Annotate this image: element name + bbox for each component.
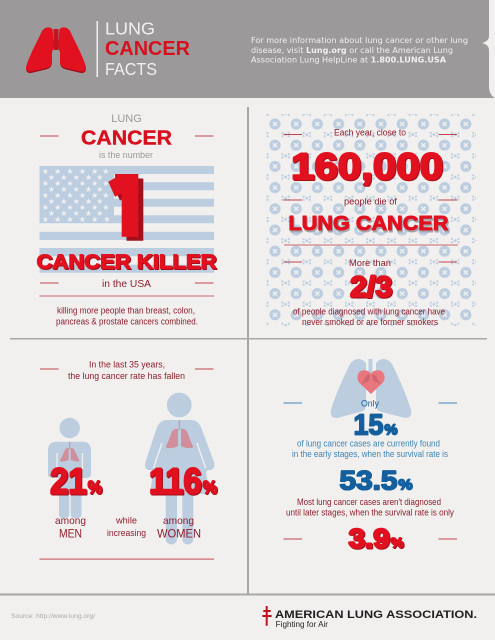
chart: american flag: ★ <box>96 185 103 194</box>
chart: american flag: ★ <box>42 167 49 176</box>
chart: american flag: ★ <box>85 209 92 218</box>
chart: american flag: ★ <box>91 191 98 200</box>
panel: survival rates <box>284 359 457 554</box>
header title: FACTS <box>105 59 157 79</box>
header band <box>0 0 495 98</box>
heading: lung cancer: is the number <box>99 150 153 161</box>
label: among women <box>157 515 201 540</box>
logo: american lung association <box>262 606 477 629</box>
chart: american flag: ★ <box>73 209 80 218</box>
chart: american flag: ★ <box>54 179 61 188</box>
label: while increasing: increasing <box>107 528 146 538</box>
stat: 15%: 15 <box>354 410 384 442</box>
stat: 53.5%: 53.5 <box>340 466 398 496</box>
chart: american flag: ★ <box>79 215 86 224</box>
divider rule <box>284 244 458 246</box>
heading: lung cancer: LUNG <box>111 113 142 125</box>
text: last 35 years <box>40 360 214 381</box>
text: last 35 years: the lung cancer rate has fallen <box>68 371 185 381</box>
text: people diagnosed: never smoked or are former smokers <box>302 317 438 327</box>
text: killing more people <box>56 306 198 326</box>
logo wordmark: Fighting for Air <box>276 620 328 629</box>
label: while increasing <box>107 516 146 538</box>
chart: american flag: ★ <box>48 185 55 194</box>
text: early stages <box>292 438 448 459</box>
chart: american flag: ★ <box>102 167 109 176</box>
chart: american flag: ★ <box>79 191 86 200</box>
chart: american flag: ★ <box>54 191 61 200</box>
label: among men <box>55 515 86 540</box>
chart: american flag: ★ <box>60 209 67 218</box>
chart: american flag: ★ <box>91 215 98 224</box>
chart: american flag: ★ <box>91 203 98 212</box>
chart: american flag: ★ <box>73 197 80 206</box>
icon: red lungs logo <box>26 27 86 73</box>
chart: american flag: ★ <box>66 167 74 176</box>
text: cancer killer: CANCER KILLER <box>36 250 217 274</box>
stat: 21%: 21 <box>50 460 86 502</box>
text: last 35 years: In the last 35 years, <box>89 360 165 370</box>
chart: american flag: ★ <box>66 215 74 224</box>
label: while increasing: while <box>115 516 137 526</box>
chart: american flag: ★ <box>48 197 55 206</box>
logo wordmark <box>275 609 477 629</box>
stat: 3.9%: 3.9 <box>348 524 390 554</box>
stat: 53.5%: % <box>398 476 412 494</box>
icon: woman figure <box>145 393 214 544</box>
text: early stages: of lung cancer cases are currently found <box>297 438 440 448</box>
icon: woman lungs <box>166 420 193 448</box>
header contact text: For more information about lung cancer or other lung <box>251 36 468 45</box>
text: later stages <box>286 497 454 518</box>
text: killing more people: pancreas & prostate cancers combined. <box>56 316 198 326</box>
big number 160,000: 160,000 <box>291 146 443 187</box>
text: each year: Each year, close to <box>334 128 406 138</box>
header contact text: disease, visit Lung.org or call the American Lung <box>251 46 449 55</box>
chart: american flag: ★ <box>42 215 49 224</box>
icon: man lungs <box>60 442 80 462</box>
chart: american flag: ★ <box>48 209 55 218</box>
chart: american flag: ★ <box>42 191 49 200</box>
chart: american flag: ★ <box>102 191 109 200</box>
stat: 116%: % <box>202 478 217 498</box>
chart: american flag: ★ <box>96 209 103 218</box>
chart: american flag: ★ <box>96 197 103 206</box>
panel dividers <box>0 107 495 596</box>
chart: american flag: ★ <box>73 173 80 182</box>
chart: american flag: ★ <box>103 215 111 224</box>
divider rule <box>40 558 214 560</box>
text: later stages: until later stages, when the survival rate is only <box>286 508 454 518</box>
chart: american flag <box>40 166 214 273</box>
chart: american flag: ★ <box>79 167 86 176</box>
chart: american flag: ★ <box>79 179 86 188</box>
icon: double-barred cross <box>262 606 272 626</box>
header title: CANCER <box>105 38 191 60</box>
big number 2/3: 2/3 <box>350 272 392 304</box>
header title: LUNG <box>105 18 155 38</box>
label: among men: MEN <box>59 528 82 540</box>
label: among women: WOMEN <box>157 528 201 540</box>
text: later stages: Most lung cancer cases aren't diagnosed <box>297 497 441 507</box>
chart: american flag: ★ <box>91 167 98 176</box>
chart: american flag: ★ <box>85 185 92 194</box>
text: lung cancer: LUNG CANCER <box>288 213 449 235</box>
source note: Source: http://www.lung.org/ <box>11 613 95 620</box>
panel: number 1 cancer killer <box>36 113 217 326</box>
label: among men: among <box>55 515 86 527</box>
chart: american flag: ★ <box>48 173 55 182</box>
stat: 3.9%: % <box>390 534 404 552</box>
chart: american flag: ★ <box>66 203 74 212</box>
text: in the USA: in the USA <box>102 278 151 290</box>
panel: men and women rates <box>40 360 217 560</box>
chart: american flag: ★ <box>96 173 103 182</box>
chart: american flag: ★ <box>60 185 67 194</box>
chart: american flag: ★ <box>73 185 80 194</box>
chart: american flag: ★ <box>42 203 49 212</box>
chart: american flag: ★ <box>85 173 92 182</box>
text: early stages: in the early stages, when the survival rate is <box>292 449 448 459</box>
chart: american flag: ★ <box>102 179 109 188</box>
text: killing more people: killing more people than breast, colon, <box>57 306 195 316</box>
chart: american flag: ★ <box>66 191 74 200</box>
chart: american flag: ★ <box>79 203 86 212</box>
icon: man figure <box>48 418 91 518</box>
label: among women: among <box>163 515 194 527</box>
big number 1 <box>108 174 143 241</box>
header contact text: Association Lung HelpLine at 1.800.LUNG.USA <box>251 56 443 64</box>
text: more than: More than <box>349 258 391 268</box>
chart: american flag: ★ <box>66 179 74 188</box>
logo wordmark: AMERICAN LUNG ASSOCIATION. <box>275 609 477 621</box>
heading: lung cancer: CANCER <box>81 126 172 150</box>
chart: american flag: ★ <box>102 203 109 212</box>
chart: american flag: ★ <box>54 215 61 224</box>
text: people die of: people die of <box>344 196 398 206</box>
chart: american flag: ★ <box>54 167 61 176</box>
stat: 3.9% <box>284 524 457 554</box>
text: people diagnosed <box>293 306 445 327</box>
chart: american flag: ★ <box>60 173 67 182</box>
text: people diagnosed: of people diagnosed with lung cancer have <box>293 306 445 316</box>
icon: lungs with heart <box>331 359 411 418</box>
x pattern background <box>266 114 476 326</box>
chart: american flag: ★ <box>54 203 61 212</box>
chart: american flag: ★ <box>42 179 49 188</box>
stat: 21%: % <box>88 478 102 498</box>
chart: american flag: ★ <box>60 197 67 206</box>
chart: american flag: ★ <box>85 197 92 206</box>
panel: 160,000 deaths <box>266 114 476 327</box>
text: only: Only <box>361 398 379 410</box>
heading: lung cancer <box>40 113 214 161</box>
chart: american flag: ★ <box>91 179 98 188</box>
header title <box>96 18 191 79</box>
stat: 15%: % <box>384 422 398 438</box>
stat: 116%: 116 <box>149 460 202 502</box>
